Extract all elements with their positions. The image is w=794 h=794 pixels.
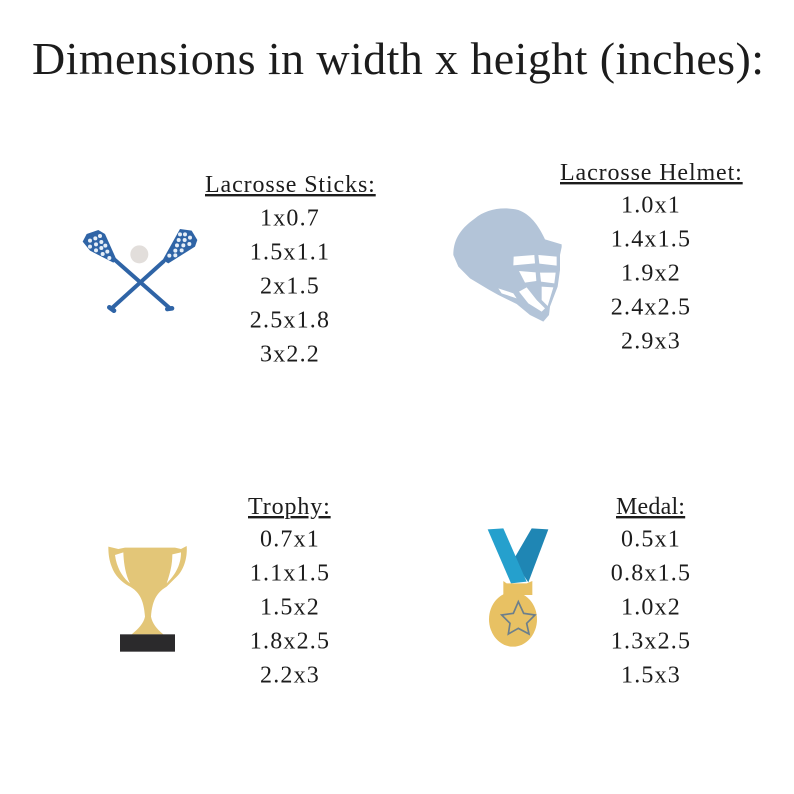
size list: trophy: 0.7x1 xyxy=(260,526,320,552)
size list: medal: 0.5x1 xyxy=(621,526,681,552)
size list: trophy xyxy=(250,526,330,688)
heading: medal: Medal: xyxy=(616,494,685,520)
size list: medal: 1.3x2.5 xyxy=(611,628,691,654)
size list: lacrosse helmet: 1.0x1 xyxy=(621,192,681,218)
size list: medal: 0.8x1.5 xyxy=(611,560,691,586)
icon: lacrosse sticks and ball xyxy=(83,229,197,311)
size list: lacrosse sticks: 2.5x1.8 xyxy=(250,308,330,334)
size list: trophy: 2.2x3 xyxy=(260,662,320,688)
icon: lacrosse helmet xyxy=(453,208,562,322)
text block: lacrosse helmet sizes xyxy=(560,160,743,354)
text block: medal sizes xyxy=(611,494,691,688)
size list: medal: 1.5x3 xyxy=(621,662,681,688)
size list: lacrosse helmet: 1.4x1.5 xyxy=(611,226,691,252)
title: Dimensions in width x height (inches): xyxy=(32,33,764,84)
text block: trophy sizes xyxy=(248,494,331,688)
icon: trophy xyxy=(108,546,187,652)
heading: lacrosse sticks: Lacrosse Sticks: xyxy=(205,172,376,198)
icon: medal xyxy=(488,528,548,647)
text block: lacrosse sticks sizes xyxy=(205,172,376,368)
size list: trophy: 1.1x1.5 xyxy=(250,560,330,586)
size list: lacrosse sticks: 1x0.7 xyxy=(260,206,320,232)
size list: trophy: 1.5x2 xyxy=(260,594,320,620)
size list: lacrosse helmet xyxy=(611,192,691,354)
size list: medal: 1.0x2 xyxy=(621,594,681,620)
size list: lacrosse helmet: 1.9x2 xyxy=(621,260,681,286)
size list: trophy: 1.8x2.5 xyxy=(250,628,330,654)
heading: lacrosse helmet: Lacrosse Helmet: xyxy=(560,160,743,186)
size list: lacrosse sticks: 3x2.2 xyxy=(260,342,320,368)
size list: lacrosse helmet: 2.9x3 xyxy=(621,328,681,354)
size list: lacrosse sticks: 2x1.5 xyxy=(260,274,320,300)
size list: lacrosse sticks xyxy=(250,206,330,368)
size list: medal xyxy=(611,526,691,688)
size list: lacrosse helmet: 2.4x2.5 xyxy=(611,294,691,320)
heading: trophy: Trophy: xyxy=(248,494,331,520)
size list: lacrosse sticks: 1.5x1.1 xyxy=(250,240,330,266)
